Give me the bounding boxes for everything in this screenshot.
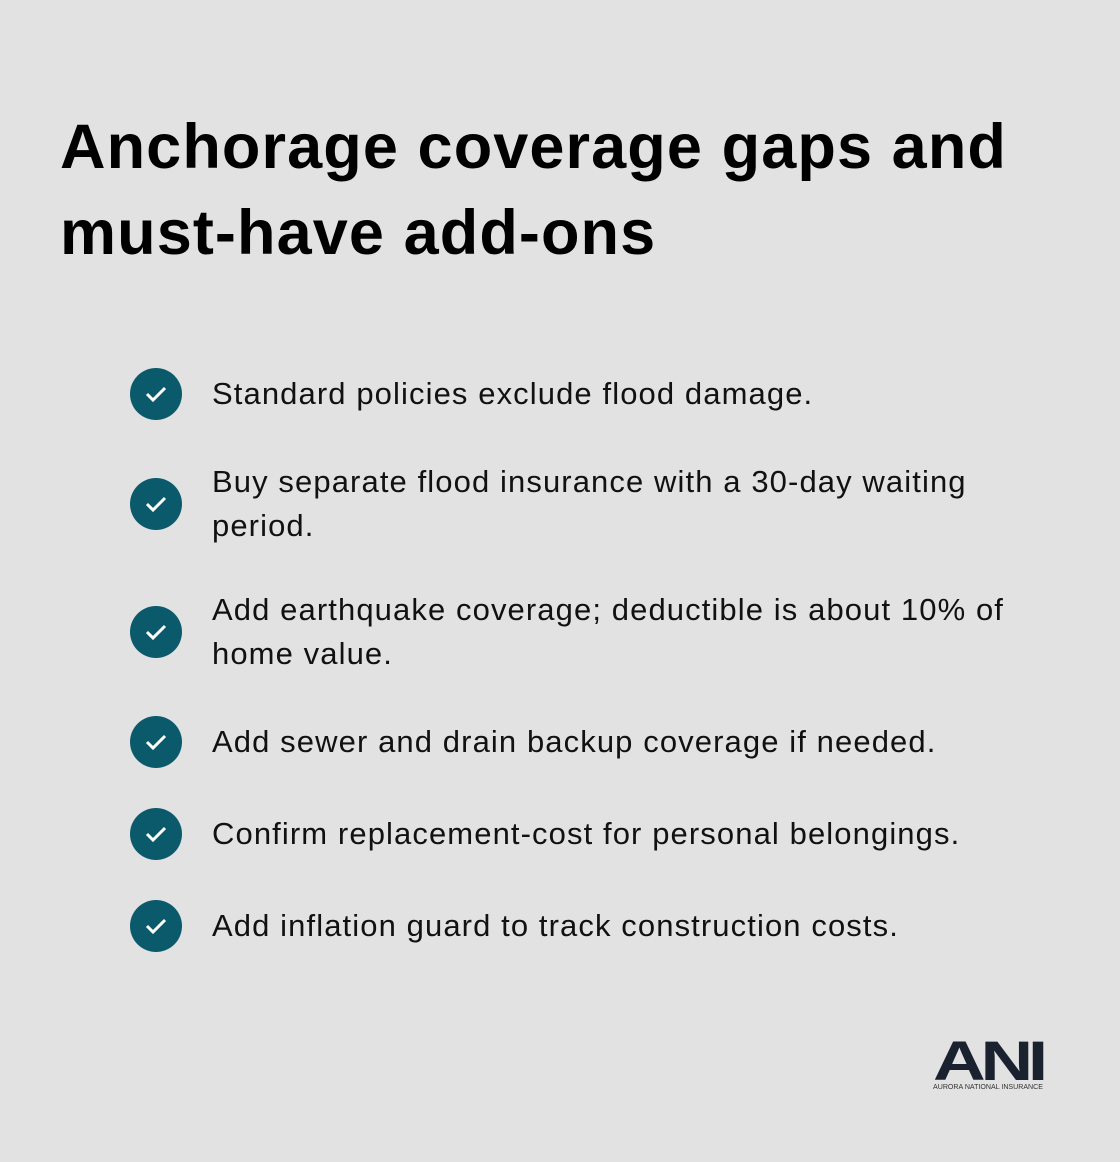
item 1: [130, 368, 813, 420]
logo: AURORA NATIONAL INSURANCE: [933, 1084, 1043, 1091]
item 1: Standard policies exclude flood damage.: [212, 376, 813, 411]
item 6: [130, 900, 899, 952]
item 5: [130, 808, 960, 860]
item 5: Confirm replacement-cost for personal belongings.: [212, 816, 960, 851]
item 6: Add inflation guard to track construction costs.: [212, 908, 899, 943]
item 2: period.: [212, 508, 314, 543]
item 4: [130, 716, 936, 768]
item 4: Add sewer and drain backup coverage if needed.: [212, 724, 936, 759]
title: [60, 112, 1007, 268]
title: Anchorage coverage gaps and: [60, 112, 1007, 182]
item 2: Buy separate flood insurance with a 30-day waiting: [212, 464, 967, 499]
item 2: [130, 464, 967, 543]
title: must-have add-ons: [60, 198, 656, 268]
item 3: Add earthquake coverage; deductible is about 10% of: [212, 592, 1004, 627]
item 3: home value.: [212, 636, 393, 671]
item 3: [130, 592, 1004, 671]
